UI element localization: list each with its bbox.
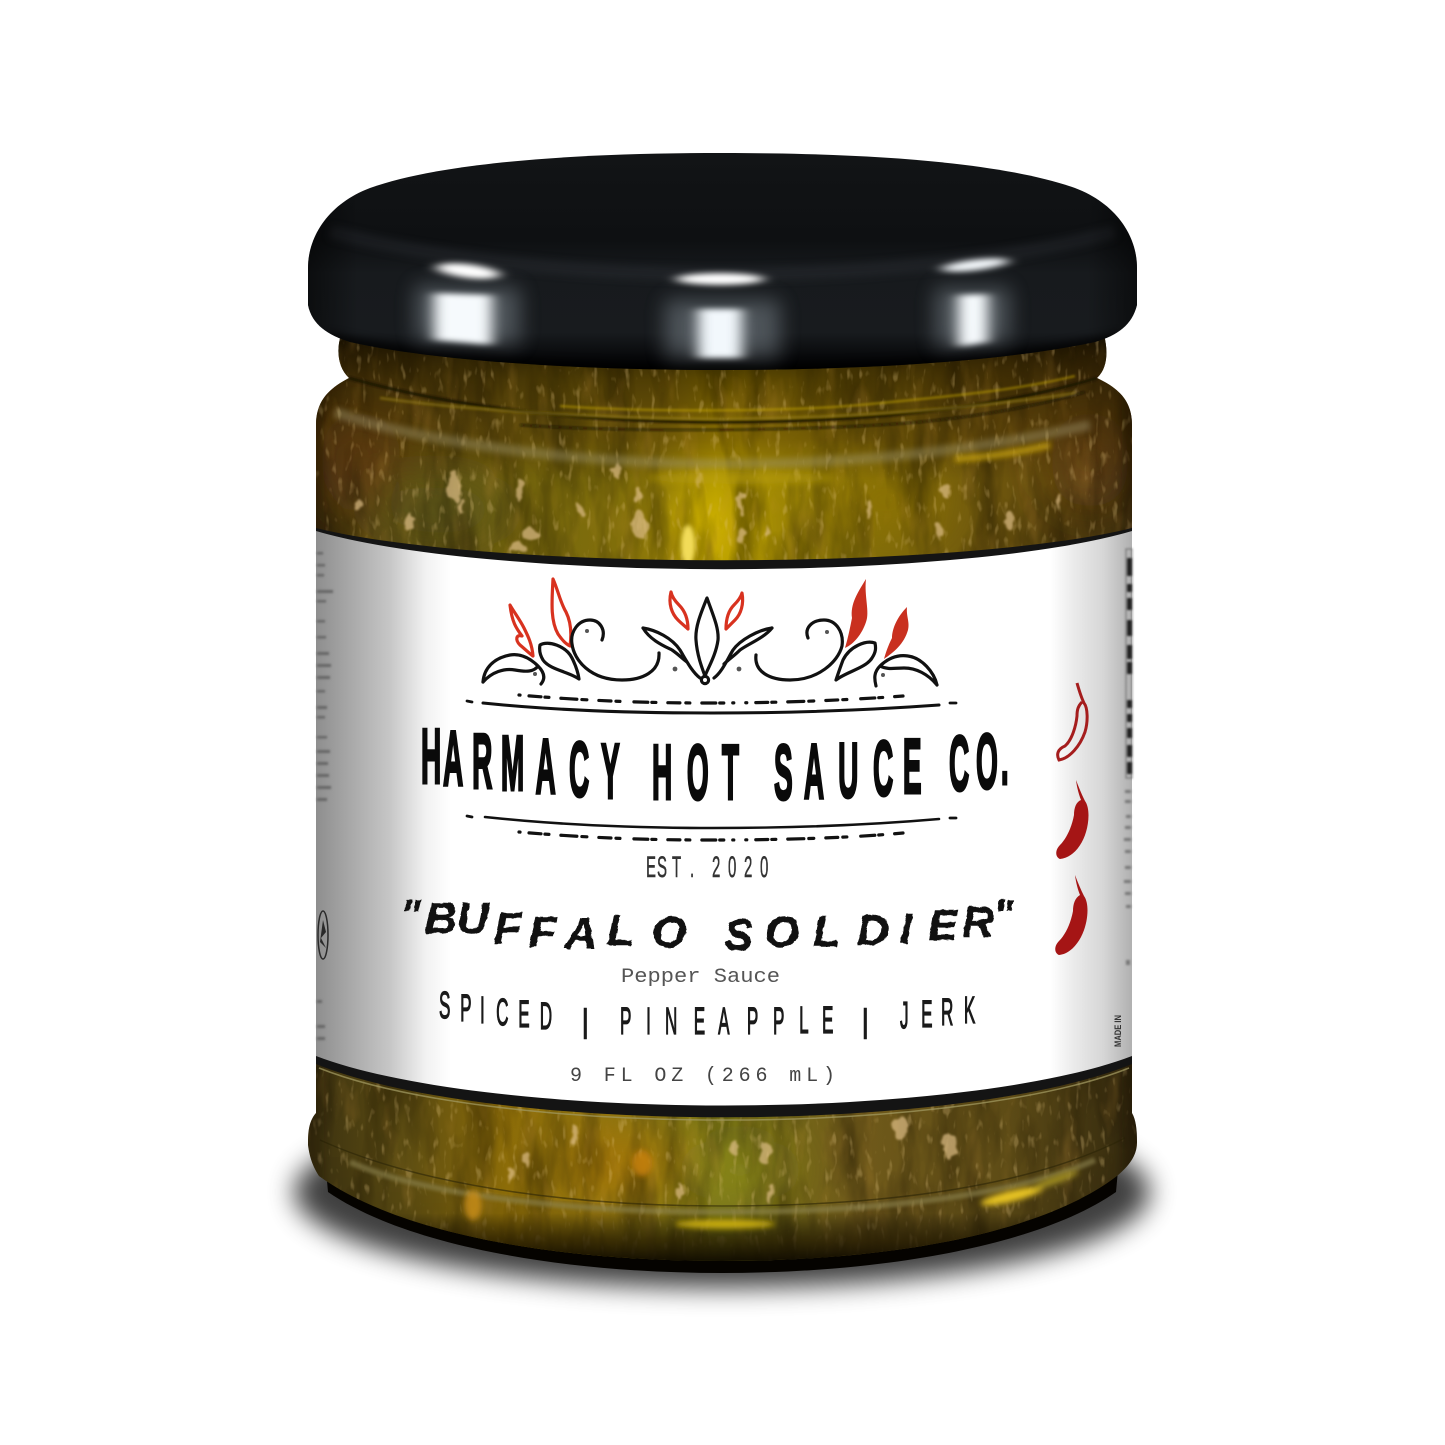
recycling seal icon [318, 911, 328, 959]
right side darkening [1122, 396, 1137, 1170]
lid body [300, 150, 1150, 375]
lid upper highlights [435, 255, 1009, 285]
neck shading [316, 338, 1132, 472]
orange fleck [632, 1150, 652, 1176]
chili filled one [1056, 780, 1088, 859]
right red flames [845, 579, 909, 659]
centre spear [696, 598, 718, 676]
right pepper [875, 656, 937, 686]
seal star [320, 920, 326, 948]
sauce upper body [316, 338, 1132, 560]
upper centre glow [645, 472, 835, 484]
ground shadow [294, 1096, 1150, 1288]
black scroll lines [483, 598, 937, 686]
right leaf [836, 642, 876, 680]
company name: HARMACY [421, 714, 620, 815]
neck threads [349, 376, 1097, 430]
shoulder glint [955, 445, 1050, 459]
lid [300, 150, 1150, 380]
base thin crease line [320, 1138, 1125, 1206]
left leaf [540, 643, 579, 679]
flavour notes: SPICED [439, 984, 552, 1038]
left side panel: blurred copy [317, 552, 333, 1040]
red flames [510, 579, 743, 656]
heat rating chilies [1055, 683, 1088, 955]
ingredient lines [1124, 790, 1131, 965]
company name [421, 714, 1009, 816]
left pepper [483, 655, 544, 684]
right scroll [756, 620, 842, 680]
sauce flecks [355, 463, 1063, 1203]
centre right petal [714, 628, 772, 678]
bright yellow glint [681, 525, 695, 565]
lid glare halo [415, 285, 1010, 358]
lid edge darkening [308, 202, 1137, 338]
lid underside dark band [328, 332, 1118, 370]
jar foot [326, 1170, 1118, 1273]
base ring pale crease [350, 1160, 1095, 1212]
company name: HOT [652, 730, 739, 816]
flavour notes: | [581, 1002, 590, 1039]
texture: fine grain [300, 330, 1150, 1270]
company name: CO. [949, 715, 1009, 807]
side origin text: MADE IN [1113, 1015, 1123, 1047]
lid upper rim sheen [330, 232, 1115, 274]
base shading [391, 1192, 1044, 1261]
upper divider [467, 695, 956, 713]
base glints [464, 1168, 1080, 1228]
left scroll [572, 620, 659, 680]
sauce lower body [308, 1064, 1137, 1261]
warm colour blotches [320, 410, 1130, 1200]
shoulder pale band [335, 412, 1090, 464]
sauce name: "BUFFALO SOLDIER" [400, 891, 1015, 960]
lower divider [467, 816, 956, 840]
flavour notes: PINEAPPLE [620, 999, 833, 1043]
jar label [316, 528, 1132, 1120]
centre left petal [643, 628, 700, 678]
ornament dots [533, 629, 885, 677]
chili filled two [1055, 875, 1088, 955]
product photo: hot sauce jar [276, 153, 1168, 1309]
texture: dark streaks [324, 360, 1137, 1244]
flavour notes: | [861, 1002, 870, 1039]
jar glass with sauce [300, 330, 1150, 1275]
company name: SAUCE [774, 724, 922, 816]
flavour notes [439, 984, 976, 1043]
flavour notes: JERK [900, 989, 976, 1037]
texture: pale streaks [300, 330, 1150, 1270]
right side panel: nutrition facts [1124, 549, 1132, 965]
product type: Pepper Sauce [621, 966, 780, 989]
nutrition black bars [1127, 558, 1132, 774]
label black border [316, 528, 1132, 1117]
flame ornament [483, 579, 937, 686]
lid vertical glare [434, 293, 988, 358]
chili outline [1058, 683, 1087, 760]
net volume: 9 FL OZ (266 mL) [570, 1065, 835, 1088]
label paper [316, 531, 1132, 1106]
side darkening [308, 397, 327, 1178]
centre ring [701, 676, 709, 684]
label lower pale rim [319, 1068, 1129, 1120]
established date: EST. 2020 [646, 852, 768, 885]
